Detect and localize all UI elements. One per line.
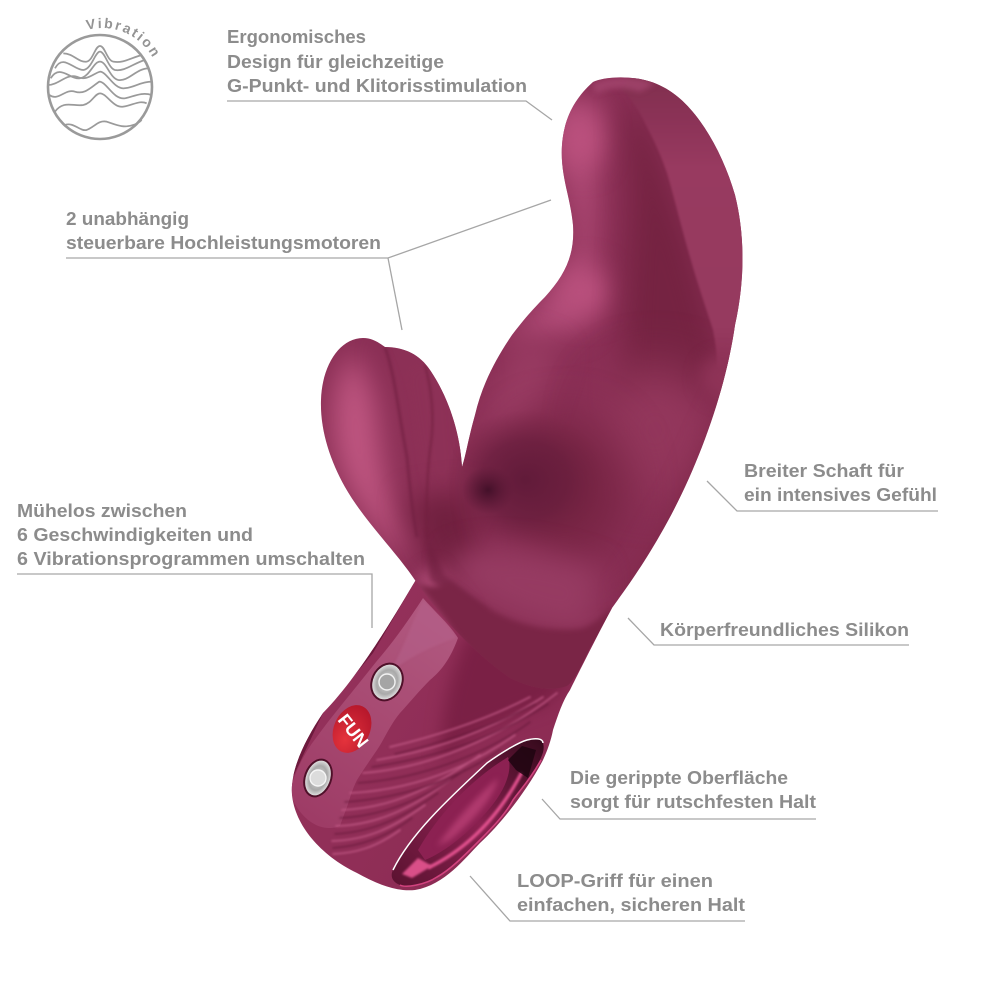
callout: speeds: 6 Vibrationsprogrammen umschalten <box>17 549 365 569</box>
handle ribs <box>332 693 557 854</box>
loop lower reflection <box>428 772 522 868</box>
collar light area <box>450 549 600 630</box>
callout: silicone <box>628 618 909 645</box>
junction shadow <box>461 424 574 532</box>
callout: wide shaft <box>707 461 938 511</box>
arm colour <box>383 346 484 467</box>
callout: ribbed surface <box>542 768 816 819</box>
soft silicone body <box>320 77 742 688</box>
junction shadow core <box>467 472 504 508</box>
arm groove one <box>385 347 417 537</box>
callout: loop grip <box>470 871 745 921</box>
callout: wide shaft: Breiter Schaft für <box>744 461 904 481</box>
callout: speeds: Mühelos zwischen <box>17 501 187 521</box>
callout: motors: steuerbare Hochleistungsmotoren <box>66 233 381 253</box>
arm groove two <box>424 366 434 490</box>
callout: motors <box>66 200 551 330</box>
button: bottom <box>298 754 338 802</box>
loop inner band <box>418 757 509 860</box>
vibration icon <box>46 18 158 140</box>
icon waves <box>48 46 152 130</box>
right lower tone <box>595 365 715 495</box>
callout: ergonomic design: Ergonomisches <box>227 27 366 47</box>
callout: loop grip: LOOP-Griff für einen <box>517 871 713 891</box>
callout: silicone: Körperfreundliches Silikon <box>660 620 909 640</box>
handle left rim <box>293 580 416 777</box>
handle dark centre <box>438 639 572 752</box>
top rim light <box>594 77 652 92</box>
mid dark <box>531 417 634 553</box>
callout: ribbed surface: Die gerippte Oberfläche <box>570 768 788 788</box>
glossy panel <box>291 598 458 828</box>
button: FUN logo: FUN <box>334 710 372 752</box>
waist highlight <box>561 268 609 316</box>
loop corner glints <box>402 858 432 878</box>
loop dark slash <box>508 746 536 778</box>
right edge shade <box>619 406 716 598</box>
loop opening <box>392 739 544 886</box>
product illustration <box>280 60 760 900</box>
panel sheen <box>396 638 425 665</box>
lower left tone <box>478 338 550 419</box>
callout: motors: 2 unabhängig <box>66 209 189 229</box>
button: top <box>364 657 410 707</box>
callout: ergonomic design: Design für gleichzeitige <box>227 52 444 72</box>
collar fold shadow <box>427 553 466 594</box>
callout: wide shaft: ein intensives Gefühl <box>744 485 937 505</box>
callout: ribbed surface: sorgt für rutschfesten Halt <box>570 792 816 812</box>
loop hole <box>392 739 544 886</box>
tip highlight <box>562 112 602 168</box>
collar left glint <box>414 564 453 614</box>
handle <box>292 580 612 890</box>
arm highlight <box>333 350 410 565</box>
upper shaft highlight <box>505 100 600 345</box>
ridge end blend <box>702 354 730 403</box>
callout: ergonomic design: G-Punkt- und Klitorisstimulation <box>227 76 527 96</box>
shaft dark band <box>620 95 725 410</box>
callout: speeds: 6 Geschwindigkeiten und <box>17 525 253 545</box>
collar band <box>420 584 611 689</box>
loop rim highlights <box>393 739 543 870</box>
callout: speeds <box>17 501 372 628</box>
arm base dark <box>405 490 480 580</box>
loop pink highlight <box>437 778 498 846</box>
callout: loop grip: einfachen, sicheren Halt <box>517 895 745 915</box>
ridge panel <box>630 78 742 368</box>
callout: ergonomic design <box>227 27 552 120</box>
icon circle <box>48 35 152 139</box>
icon label: Vibration <box>85 18 158 57</box>
button: FUN logo <box>325 699 379 759</box>
